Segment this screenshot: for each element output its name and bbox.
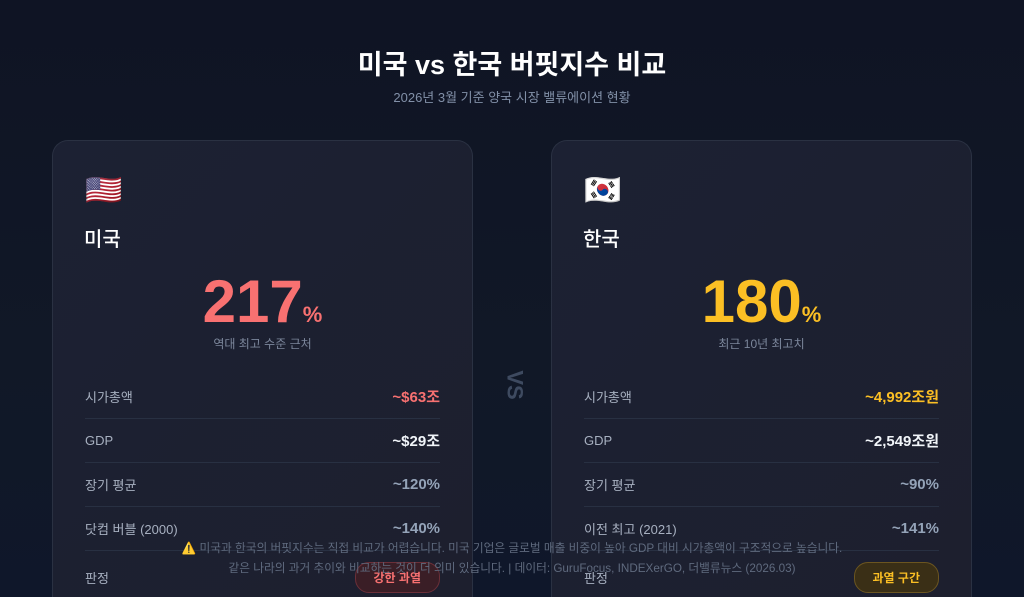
rows: 장기 평균 [584, 478, 635, 493]
vs label: VS [503, 370, 528, 400]
rows: 시가총액 [85, 390, 133, 405]
panel: Korea [551, 140, 972, 597]
rows: 판정 [584, 570, 608, 586]
rows [584, 389, 939, 593]
panel: USA [52, 140, 473, 597]
rows [85, 389, 440, 593]
rows: ~$29조 [392, 433, 440, 450]
rows: ~120% [393, 476, 440, 493]
country name: 한국 [583, 229, 620, 251]
icon: KR flag: 🇰🇷 [584, 174, 621, 207]
caption: 최근 10년 최고치 [718, 337, 805, 351]
rows: 시가총액 [584, 390, 632, 405]
rows: ~2,549조원 [865, 433, 939, 450]
rows: 강한 과열 [374, 570, 421, 584]
rows: 닷컴 버블 (2000) [85, 522, 178, 537]
icon: US flag: 🇺🇸 [85, 174, 122, 207]
big number: 180% [702, 268, 821, 335]
rows: ~4,992조원 [865, 389, 939, 406]
footer note [182, 542, 842, 575]
rows: GDP [85, 433, 113, 448]
footer note: ⚠️ 미국과 한국의 버핏지수는 직접 비교가 어렵습니다. 미국 기업은 글로벌 매출 비중이 높아 GDP 대비 시가총액이 구조적으로 높습니다. [182, 542, 842, 555]
rows: ~140% [393, 520, 440, 537]
rows: 과열 구간 [872, 570, 920, 584]
rows: ~141% [892, 520, 939, 537]
rows: 장기 평균 [85, 478, 136, 493]
caption: 역대 최고 수준 근처 [213, 337, 312, 351]
rows: 이전 최고 (2021) [584, 522, 677, 537]
footer note: 같은 나라의 과거 추이와 비교하는 것이 더 의미 있습니다. | 데이터: GuruFocus, INDEXerGO, 더밸류뉴스 (2026.03) [229, 562, 795, 575]
rows: 판정 [85, 570, 109, 586]
country name: 미국 [84, 229, 121, 251]
title: 미국 vs 한국 버핏지수 비교 [358, 50, 666, 80]
rows: GDP [584, 433, 612, 448]
rows: ~90% [900, 476, 939, 493]
rows: ~$63조 [392, 389, 440, 406]
big number: 217% [203, 268, 322, 335]
subtitle: 2026년 3월 기준 양국 시장 밸류에이션 현황 [393, 90, 631, 105]
